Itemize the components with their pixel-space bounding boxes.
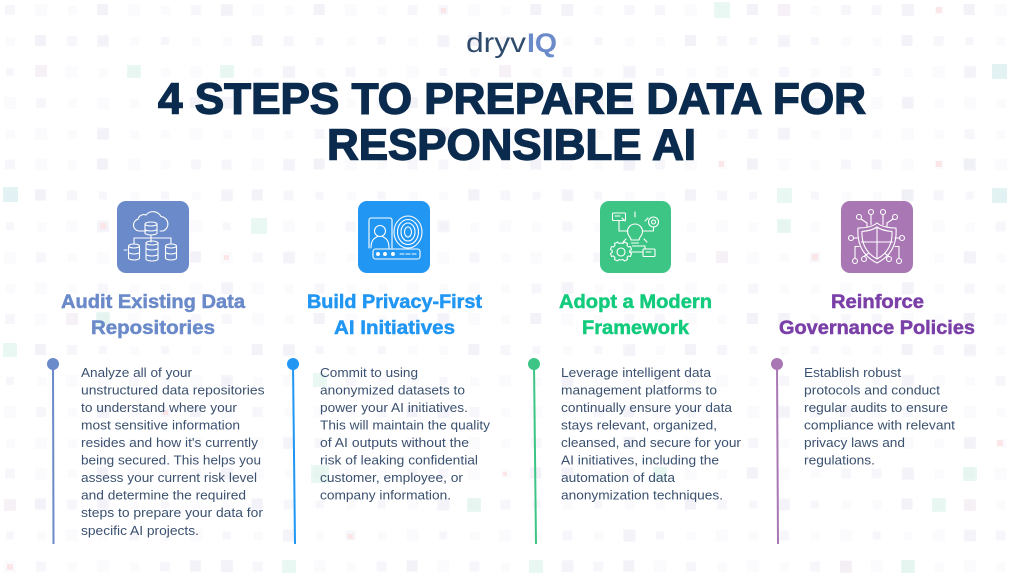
title: 4 STEPS TO PREPARE DATA FOR xyxy=(158,74,866,124)
heading: AI Initiatives xyxy=(334,317,455,339)
body text: regulations. xyxy=(804,453,875,468)
body text: company information. xyxy=(320,488,451,503)
logo: dryvIQ: IQ xyxy=(527,28,557,58)
icon: shield with circuit nodes xyxy=(841,201,913,273)
panel: step 4 governance xyxy=(771,201,975,544)
heading: Reinforce xyxy=(831,291,924,313)
body text: risk of leaking confidential xyxy=(320,453,478,468)
timeline xyxy=(771,358,783,544)
body text: privacy laws and xyxy=(804,435,905,450)
body text: Commit to using xyxy=(320,365,418,380)
body text: continually ensure your data xyxy=(561,400,733,415)
heading: Adopt a Modern xyxy=(559,291,712,313)
timeline xyxy=(47,358,59,544)
heading xyxy=(559,291,712,339)
body text: resides and how it's currently xyxy=(81,435,259,450)
body text: unstructured data repositories xyxy=(81,382,265,397)
logo: dryvIQ: dryv xyxy=(466,27,526,58)
icon: lightbulb and gear workflow xyxy=(600,201,671,273)
body text: to understand where your xyxy=(81,400,238,415)
body text: AI initiatives, including the xyxy=(561,453,719,468)
body text: steps to prepare your data for xyxy=(81,505,264,520)
heading xyxy=(61,291,245,339)
body text: Analyze all of your xyxy=(81,365,193,380)
heading xyxy=(307,291,483,339)
body text: power your AI initiatives. xyxy=(320,400,468,415)
logo: dryvIQ xyxy=(466,27,557,58)
body text: protocols and conduct xyxy=(804,382,940,397)
title xyxy=(158,74,866,170)
timeline xyxy=(528,358,540,544)
body text: stays relevant, organized, xyxy=(561,417,717,432)
heading: Audit Existing Data xyxy=(61,291,245,313)
body text xyxy=(81,365,265,538)
heading: Build Privacy-First xyxy=(307,291,483,313)
body text xyxy=(561,365,742,503)
body text: This will maintain the quality xyxy=(320,417,491,432)
icon: id card and fingerprint xyxy=(358,201,430,273)
body text: cleansed, and secure for your xyxy=(561,435,742,450)
body text: customer, employee, or xyxy=(320,470,464,485)
title: RESPONSIBLE AI xyxy=(327,120,696,170)
heading: Governance Policies xyxy=(779,317,975,339)
body text: of AI outputs without the xyxy=(320,435,469,450)
heading: Repositories xyxy=(91,317,215,339)
body text: automation of data xyxy=(561,470,676,485)
panel: step 2 privacy xyxy=(287,201,491,544)
panel: step 1 audit xyxy=(47,201,265,544)
body text: anonymized datasets to xyxy=(320,382,465,397)
heading: Framework xyxy=(582,317,689,339)
body text xyxy=(804,365,955,468)
panel: step 3 framework xyxy=(528,201,742,544)
body text: Establish robust xyxy=(804,365,901,380)
icon: cloud databases xyxy=(117,201,189,273)
body text xyxy=(320,365,491,503)
body text: being secured. This helps you xyxy=(81,453,261,468)
body text: assess your current risk level xyxy=(81,470,257,485)
timeline xyxy=(287,358,299,544)
body text: and determine the required xyxy=(81,488,246,503)
body text: compliance with relevant xyxy=(804,417,955,432)
body text: most sensitive information xyxy=(81,417,240,432)
heading xyxy=(779,291,975,339)
body text: specific AI projects. xyxy=(81,523,199,538)
body text: anonymization techniques. xyxy=(561,488,723,503)
body text: Leverage intelligent data xyxy=(561,365,712,380)
body text: regular audits to ensure xyxy=(804,400,948,415)
body text: management platforms to xyxy=(561,382,717,397)
